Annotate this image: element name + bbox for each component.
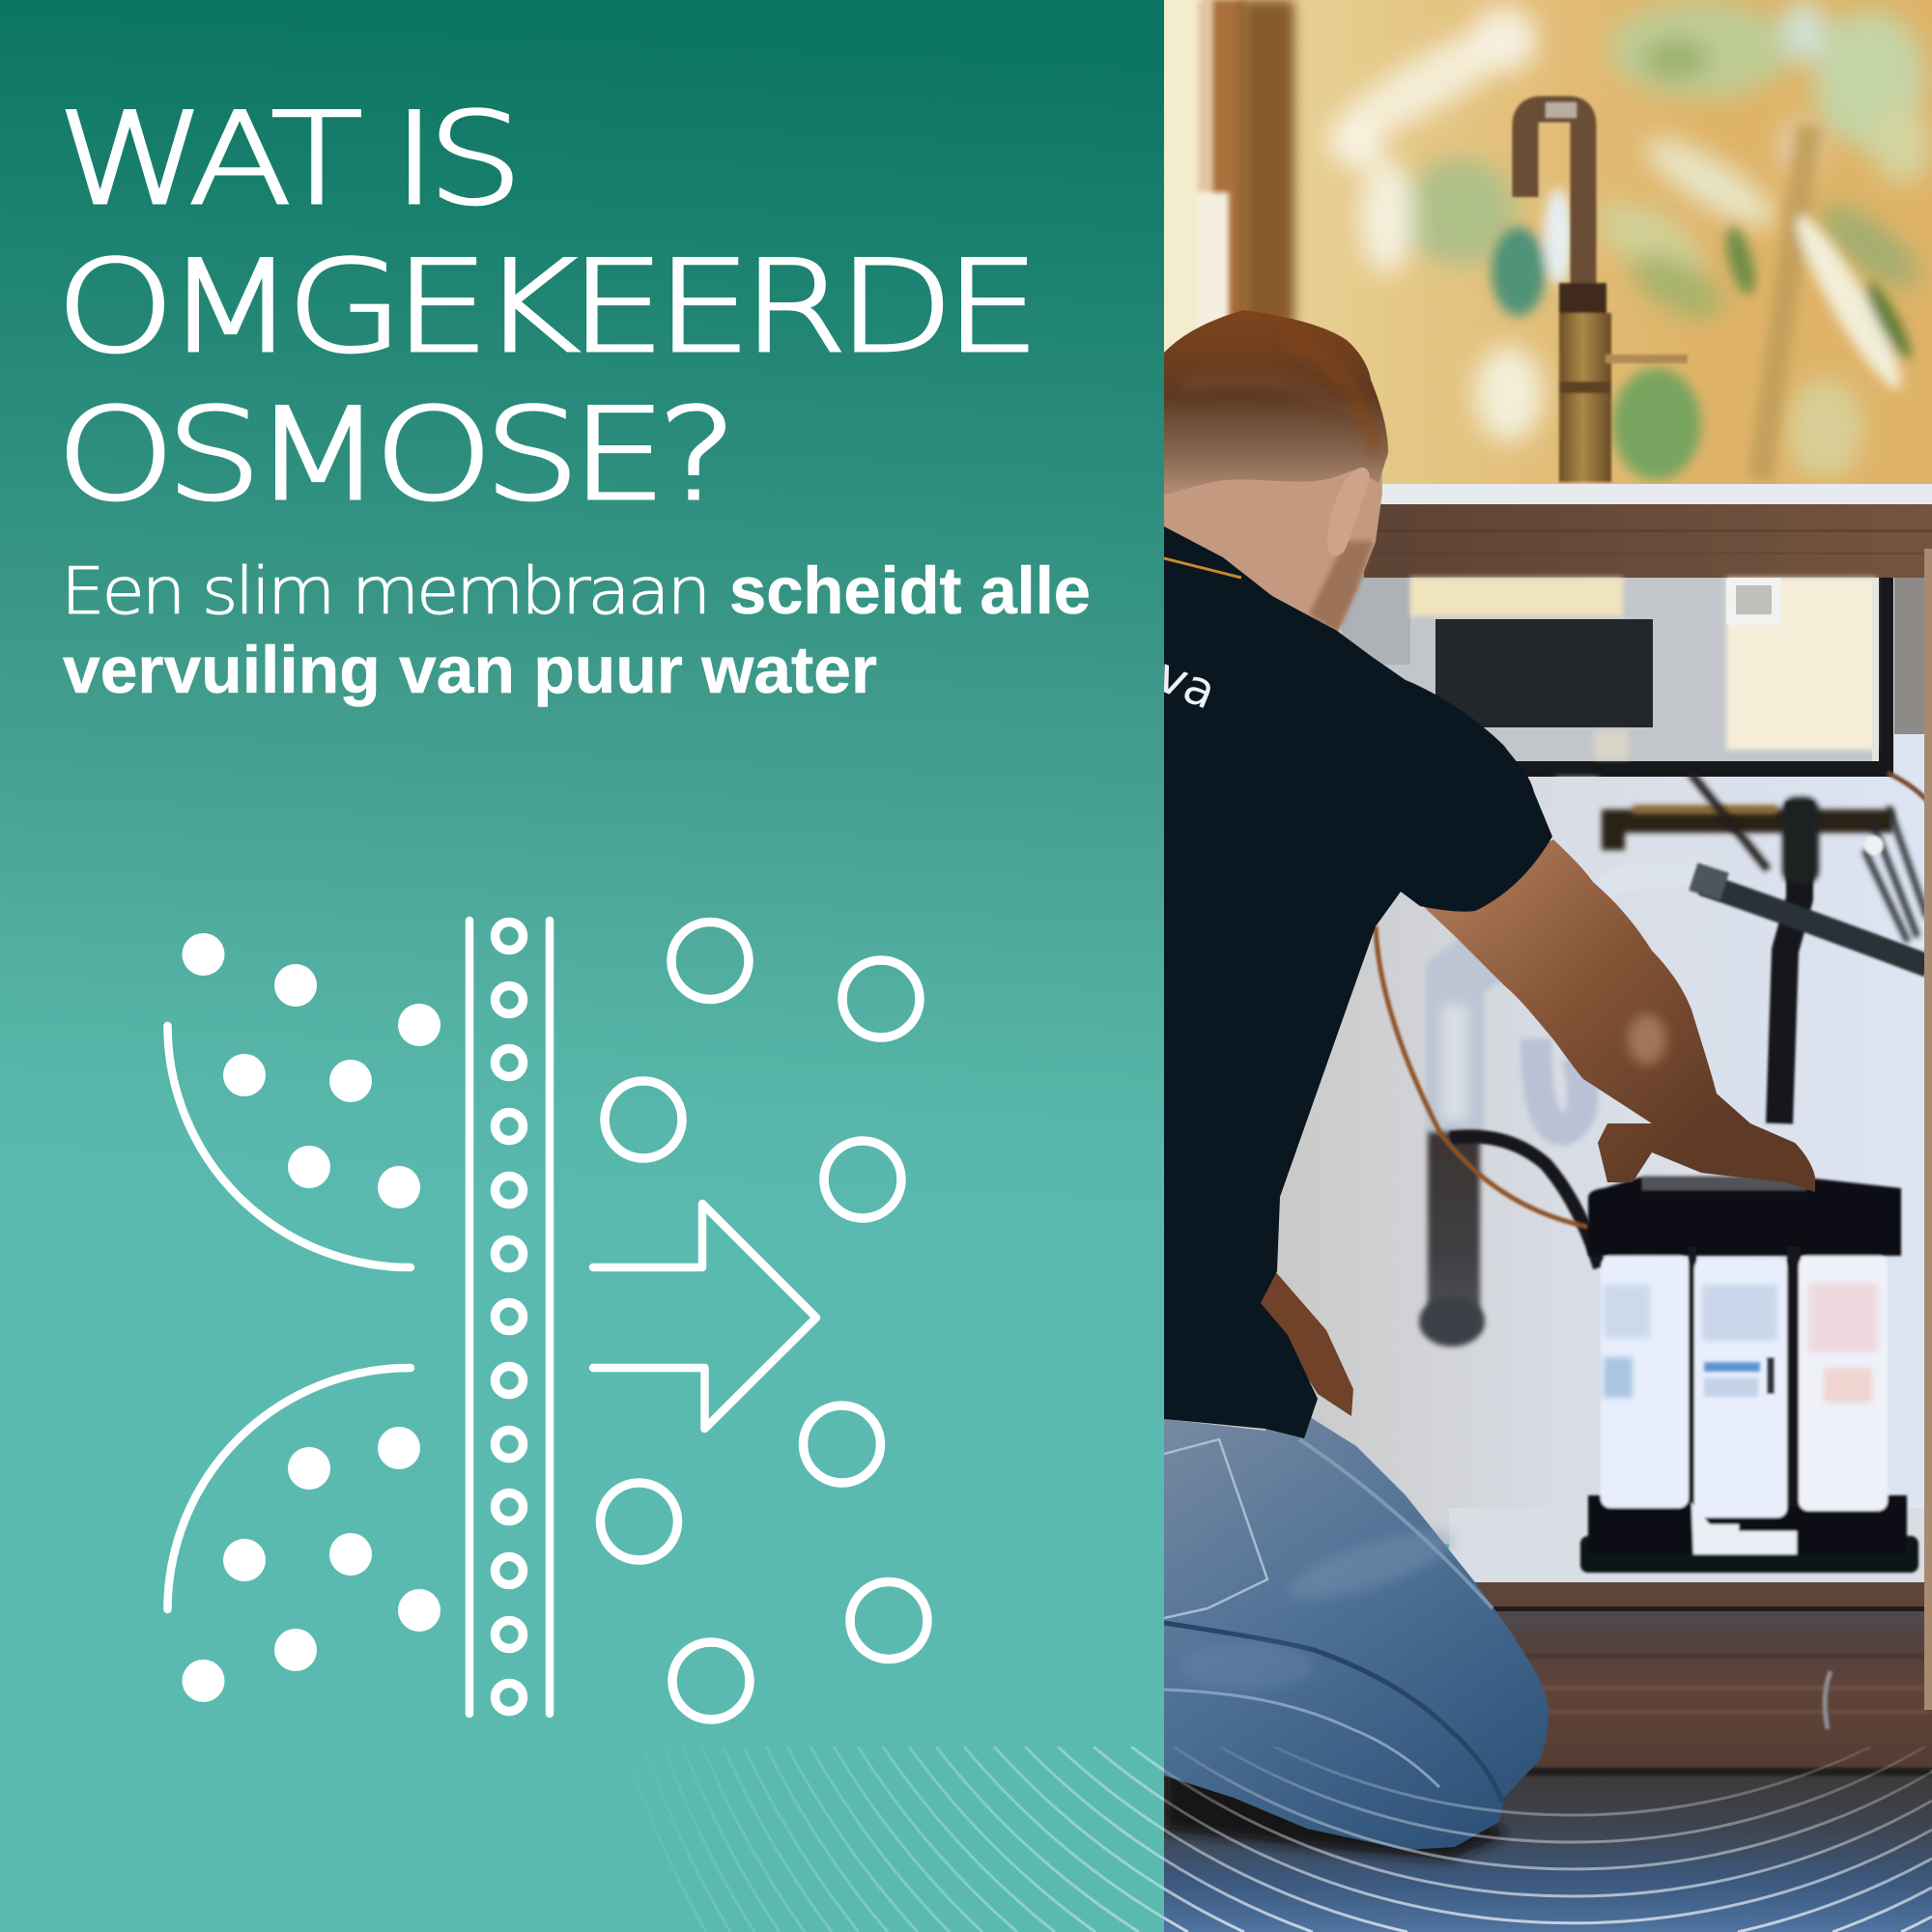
man: arm and hand [1423,839,1815,1192]
elbow highlight [1628,1014,1666,1065]
plumbing and hoses [1376,773,1932,1347]
knee shadow [1164,1768,1507,1860]
title: WAT IS [57,85,514,233]
cabinet floor and plinth [1449,549,1932,1770]
title: OMGEKEERDE [56,233,1031,381]
title: OSMOSE? [56,381,728,528]
faucet [1525,109,1688,482]
pure water molecules [601,922,927,1719]
inflow guide curves [168,1026,411,1609]
filter cartridge 3 [1799,1256,1888,1511]
man: jeans [1164,1391,1548,1850]
wall under the sink [1164,578,1932,1544]
filter cartridge 1 [1601,1256,1689,1508]
countertop [1364,484,1932,578]
title [56,85,1031,528]
membrane pores [495,922,524,1712]
background: kitchen wall and blurred plant [1164,0,1932,493]
photo: technician installing a filter under the sink [1150,0,1932,1932]
filter cartridge 2 [1694,1259,1787,1518]
subtitle: scheidt alle [729,554,1091,628]
subtitle [61,554,1091,707]
man: second hand on hip [1261,1271,1353,1416]
diagram: reverse osmosis membrane [168,921,927,1719]
man: navy polo shirt [1150,526,1552,1438]
reverse osmosis filter unit [1580,1175,1918,1573]
drain trap [1455,952,1492,1133]
man: head and neck [1164,310,1388,634]
membrane walls [469,921,550,1714]
subtitle: vervuiling van puur water [63,633,877,707]
arrow [593,1204,816,1429]
steel sink box [1342,578,1925,777]
decorative concentric arcs [625,1747,1932,1932]
contaminant particles bottom [182,1427,440,1702]
floor [1164,1774,1932,1932]
subtitle: Een slim membraan [61,554,708,629]
shirt lettering: va [1150,646,1224,721]
white fittings [1691,1502,1797,1554]
contaminant particles top [182,933,440,1208]
panel: teal background [0,0,1164,1932]
